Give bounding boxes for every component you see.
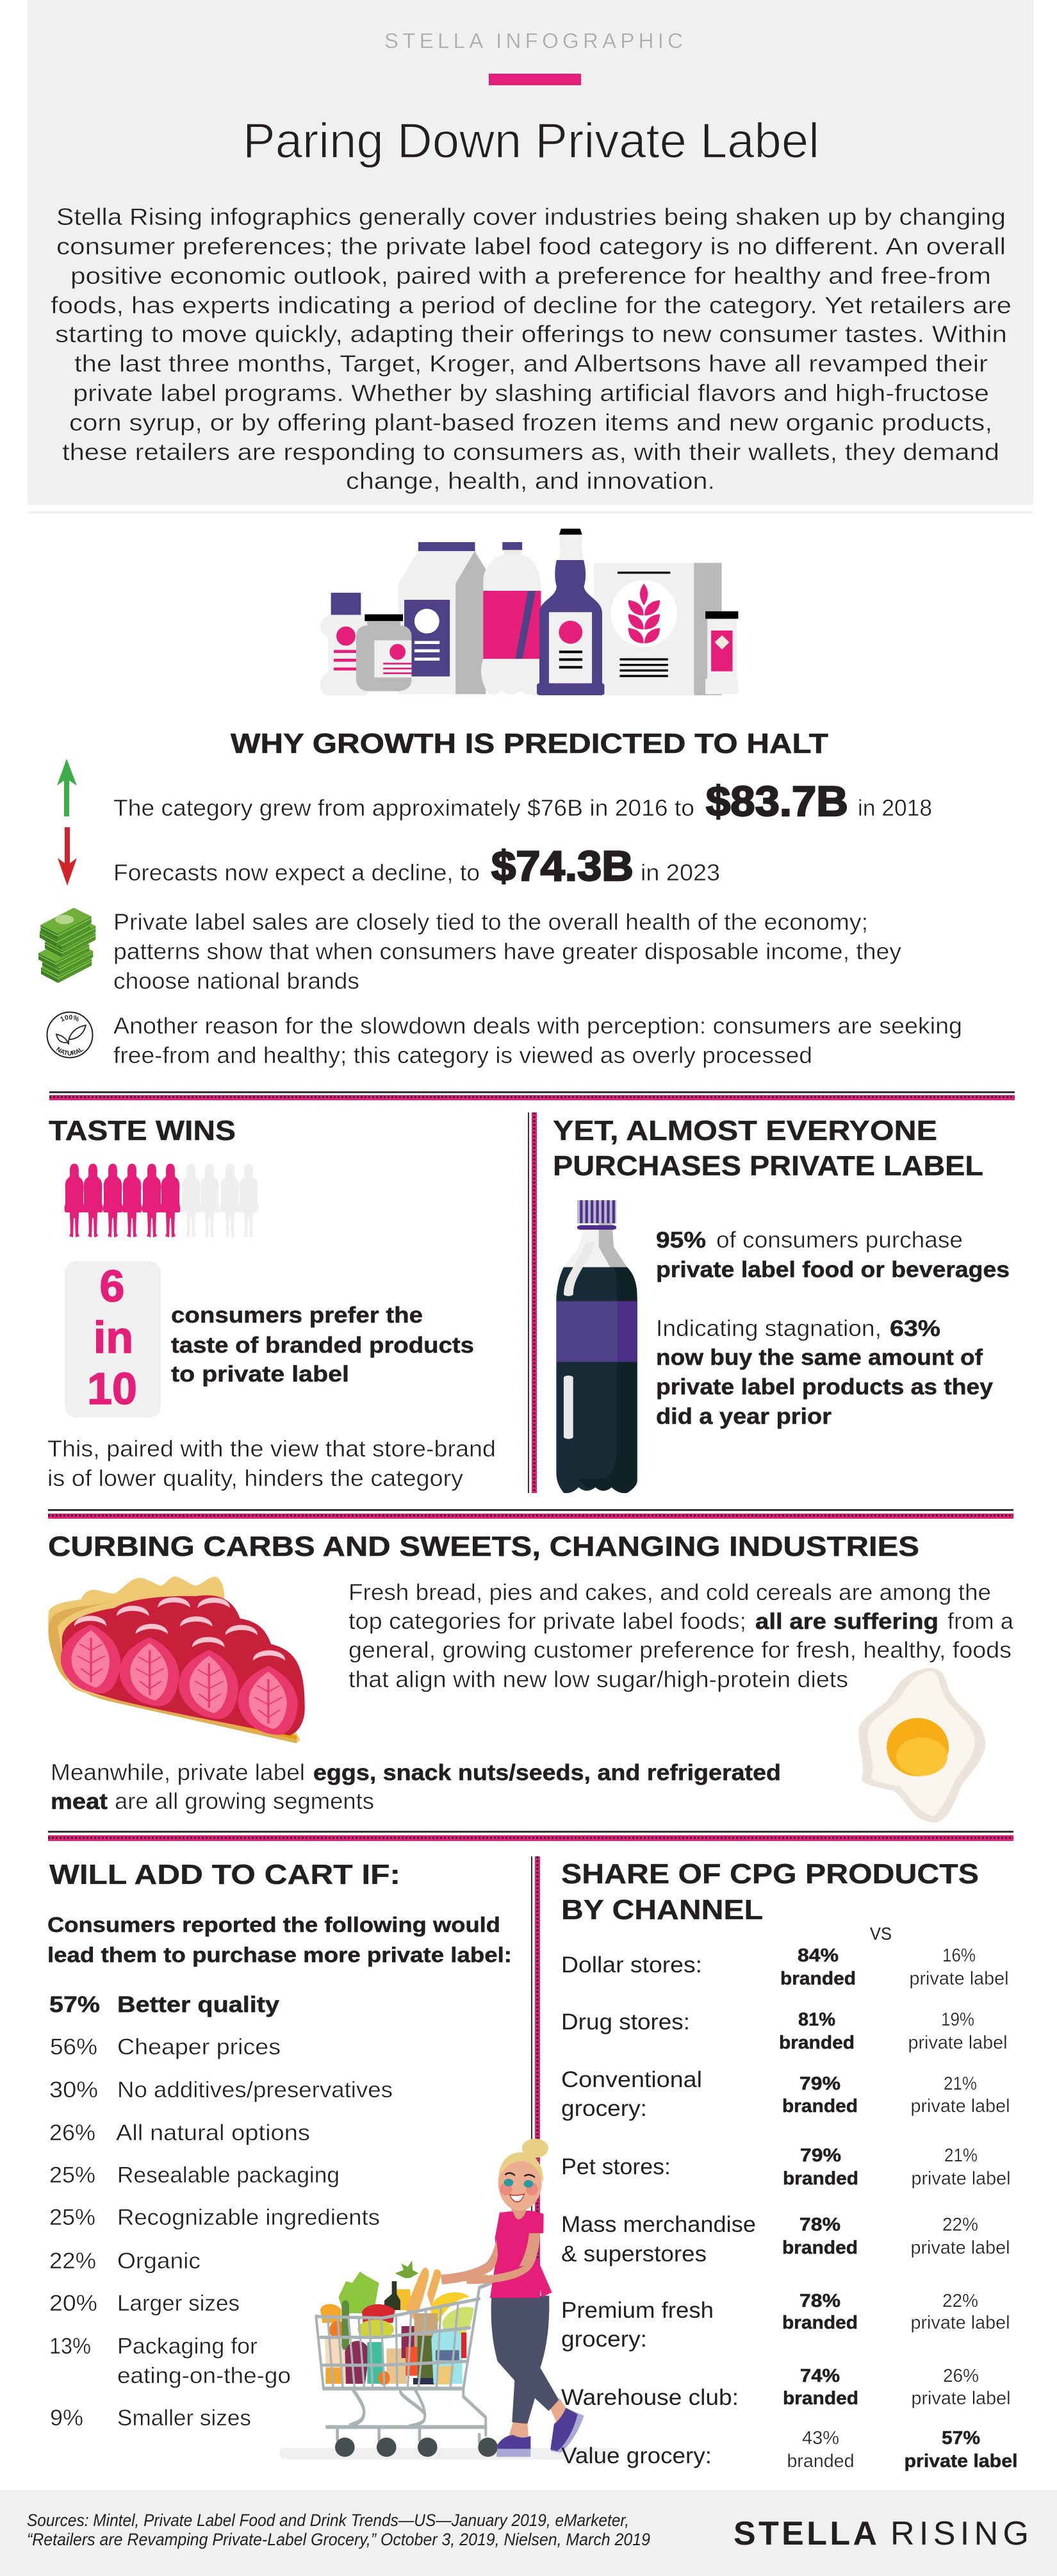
list: purchase drivers: 9% (50, 2406, 83, 2431)
woman figure (441, 2139, 584, 2457)
table: channel shares: private label (910, 1969, 1008, 1989)
subheading: lead them to purchase more private label: (47, 1943, 512, 1967)
table: channel shares: grocery: (561, 2096, 647, 2121)
heading (553, 1115, 983, 1182)
illustration: woman pushing shopping cart (279, 2139, 619, 2459)
pictogram: 6 of 10 people (64, 1164, 259, 1237)
text: top categories suffering: Fresh bread, pies and cakes, and cold cereals are among the (348, 1579, 991, 1605)
table: channel shares: 21% (944, 2145, 978, 2166)
text: growing segments: eggs, snack nuts/seeds, and refrigerated (313, 1760, 781, 1785)
decline stat: Forecasts now expect a decline, to (113, 859, 480, 886)
icon: stack of money (38, 908, 95, 983)
eyebrow: Stella Infographic: STELLA INFOGRAPHIC (384, 29, 683, 53)
table: channel shares: private label (911, 2168, 1011, 2189)
panel: why growth is predicted to halt (38, 728, 962, 1068)
panel: curbing carbs and sweets (48, 1531, 1014, 1822)
list: purchase drivers: 22% (49, 2249, 96, 2274)
text: top categories suffering: from a (947, 1608, 1014, 1634)
panel: header (28, 0, 1033, 505)
table: channel shares: Drug stores: (561, 2010, 690, 2035)
heading: BY CHANNEL (561, 1894, 763, 1926)
list: purchase drivers: Better quality (117, 1992, 280, 2017)
cart wheels (335, 2438, 498, 2457)
table: channel shares: 81% (798, 2010, 835, 2030)
accent bar (489, 74, 581, 85)
intro paragraph: Stella Rising infographics generally cover industries being shaken up by changing (56, 204, 1006, 230)
table: channel shares: private label (911, 2313, 1010, 2333)
sources: “Retailers are Revamping Private-Label Grocery,” October 3, 2019, Nielsen, March 2019 (27, 2530, 650, 2549)
logo: Stella Rising (733, 2515, 1029, 2552)
table: channel shares: Warehouse club: (561, 2385, 739, 2410)
table: channel shares: branded (782, 2313, 858, 2333)
intro paragraph: private label programs. Whether by slashing artificial flavors and high-fructose (73, 380, 989, 406)
perception text: free-from and healthy; this category is viewed as overly processed (113, 1042, 812, 1068)
economy text: Private label sales are closely tied to the overall health of the economy; (113, 909, 868, 935)
cart frame (316, 2281, 497, 2441)
illustration: fried egg (858, 1668, 985, 1822)
heading: PURCHASES PRIVATE LABEL (553, 1150, 983, 1182)
stat: 63%: Indicating stagnation, (656, 1315, 881, 1341)
table: channel shares: 57% (942, 2428, 980, 2448)
logo: Stella Rising: RISING (890, 2515, 1029, 2552)
stat: 95%: of consumers purchase (716, 1226, 963, 1253)
text: top categories suffering (348, 1579, 1014, 1692)
intro paragraph: corn syrup, or by offering plant-based frozen items and new organic products, (69, 409, 992, 436)
panel: will add to cart if (47, 1859, 512, 2431)
intro paragraph: positive economic outlook, paired with a preference for healthy and free-from (70, 263, 991, 289)
table: channel shares: Value grocery: (561, 2443, 712, 2468)
list: purchase drivers: 26% (49, 2120, 95, 2145)
intro paragraph: foods, has experts indicating a period of decline for the category. Yet retailers are (51, 292, 1012, 318)
list: purchase drivers: 56% (50, 2035, 97, 2060)
growth stat (113, 777, 932, 825)
statement: consumers prefer branded taste: consumers prefer the (171, 1303, 423, 1328)
table: channel shares: 79% (800, 2145, 841, 2166)
table: channel shares: 19% (941, 2010, 974, 2030)
intro paragraph: consumer preferences; the private label food category is no different. An overall (56, 233, 1006, 260)
table: channel shares: private label (905, 2451, 1017, 2472)
list: purchase drivers: Packaging for (117, 2334, 258, 2359)
list: purchase drivers: 20% (49, 2291, 97, 2316)
note: store-brand quality: is of lower quality, hinders the category (47, 1465, 463, 1491)
list: purchase drivers: Recognizable ingredients (117, 2205, 380, 2230)
icon: 100% natural badge (46, 1011, 94, 1059)
economy text: choose national brands (113, 968, 359, 994)
list: purchase drivers: eating-on-the-go (117, 2363, 291, 2388)
stat: 95%: private label food or beverages (656, 1257, 1010, 1282)
table: channel shares: branded (783, 2168, 858, 2189)
table: channel shares: private label (911, 2238, 1010, 2258)
table: channel shares: 78% (799, 2215, 840, 2235)
table: channel shares: private label (908, 2033, 1007, 2053)
list: purchase drivers: Smaller sizes (117, 2406, 251, 2431)
stat: 63%: 63% (890, 1316, 940, 1341)
table: channel shares: 22% (942, 2215, 978, 2235)
economy text: patterns show that when consumers have greater disposable income, they (113, 938, 901, 964)
table: channel shares: Dollar stores: (561, 1953, 702, 1977)
title: Paring Down Private Label (243, 113, 819, 169)
list: purchase drivers: 25% (49, 2205, 95, 2230)
list: purchase drivers (49, 1992, 393, 2431)
table: channel shares: 22% (942, 2291, 978, 2311)
table: channel shares: Conventional (561, 2067, 702, 2092)
text: growing segments: meat (51, 1789, 108, 1814)
illustration: soda bottle (556, 1200, 637, 1493)
perception text (113, 1012, 962, 1068)
heading: TASTE WINS (49, 1115, 236, 1146)
table: channel shares: branded (783, 2388, 858, 2409)
table: channel shares: branded (780, 1969, 856, 1989)
text: top categories suffering: top categories for private label foods; (348, 1608, 746, 1634)
list: purchase drivers: Organic (117, 2249, 201, 2274)
statement: consumers prefer branded taste: to private label (171, 1362, 349, 1387)
heading: WILL ADD TO CART IF: (49, 1859, 400, 1890)
stat: 63% (656, 1315, 994, 1429)
intro paragraph: the last three months, Target, Kroger, and Albertsons have all revamped their (74, 351, 988, 377)
list: purchase drivers: No additives/preservatives (117, 2077, 393, 2102)
subheading: Consumers reported the following would (47, 1913, 500, 1936)
list: purchase drivers: All natural options (116, 2120, 310, 2145)
perception text: Another reason for the slowdown deals with perception: consumers are seeking (113, 1012, 962, 1039)
intro paragraph (51, 204, 1012, 494)
table: channel shares: 79% (799, 2074, 840, 2094)
subheading (47, 1913, 512, 1967)
icon: red down arrow (58, 827, 77, 886)
growth stat: $83.7B (706, 777, 848, 825)
callout: 6 in 10: 10 (87, 1364, 137, 1414)
table: channel shares: 74% (800, 2366, 840, 2386)
heading: SHARE OF CPG PRODUCTS (561, 1858, 979, 1890)
table: channel shares: Premium fresh (561, 2298, 714, 2323)
list: purchase drivers: 25% (49, 2163, 95, 2188)
stat: 95%: 95% (656, 1228, 706, 1253)
callout: 6 in 10: in (94, 1312, 133, 1362)
stat: 63%: private label products as they (656, 1375, 994, 1399)
callout: 6 in 10: 6 (100, 1261, 124, 1311)
heading: WHY GROWTH IS PREDICTED TO HALT (231, 728, 828, 759)
heading: CURBING CARBS AND SWEETS, CHANGING INDUSTRIES (48, 1531, 919, 1562)
table: channel shares: branded (782, 2096, 858, 2117)
growth stat: in 2018 (858, 795, 932, 821)
economy text (113, 909, 901, 994)
panel: share of CPG products by channel (561, 1858, 1017, 2472)
decline stat: $74.3B (491, 842, 634, 889)
growth stat: The category grew from approximately $76B in 2016 to (113, 795, 694, 821)
panel: taste wins (47, 1115, 496, 1491)
sources (27, 2511, 650, 2549)
table: channel shares: private label (911, 2096, 1010, 2117)
table: channel shares: & superstores (561, 2242, 707, 2266)
stat: 63%: now buy the same amount of (656, 1345, 983, 1370)
list: purchase drivers: 30% (49, 2077, 98, 2102)
table: channel shares: Mass merchandise (561, 2212, 756, 2237)
list: purchase drivers: Larger sizes (117, 2291, 240, 2316)
statement: consumers prefer branded taste (171, 1303, 474, 1387)
table: channel shares (561, 1945, 1017, 2472)
table: channel shares: private label (911, 2388, 1011, 2409)
table: channel shares: 16% (942, 1945, 976, 1966)
callout: 6 in 10 (65, 1261, 161, 1417)
statement: consumers prefer branded taste: taste of branded products (171, 1333, 474, 1358)
groceries in the cart (320, 2261, 474, 2385)
illustration: strawberry pie slice (48, 1576, 305, 1744)
note: store-brand quality (47, 1435, 496, 1491)
text: top categories suffering: that align with new low sugar/high-protein diets (348, 1666, 848, 1692)
table: channel shares: branded (787, 2451, 855, 2472)
intro paragraph: change, health, and innovation. (346, 468, 715, 494)
vs label: VS (870, 1924, 892, 1944)
illustration: private label product packages (320, 529, 738, 695)
sources: Sources: Mintel, Private Label Food and Drink Trends—US—January 2019, eMarketer, (27, 2511, 629, 2530)
icon: 100% natural badge: NATURAL (56, 1047, 83, 1056)
table: channel shares: grocery: (561, 2327, 647, 2352)
heading: YET, ALMOST EVERYONE (553, 1115, 937, 1146)
decline stat (113, 842, 720, 889)
table: channel shares: 26% (943, 2366, 979, 2386)
list: purchase drivers: 13% (49, 2334, 91, 2359)
table: channel shares: 84% (798, 1945, 839, 1966)
list: purchase drivers: Resealable packaging (117, 2163, 340, 2188)
stat: 63%: did a year prior (656, 1404, 832, 1429)
icon: 100% natural badge: 100% (60, 1015, 79, 1021)
table: channel shares: branded (782, 2238, 858, 2258)
panel: footer (0, 2490, 1057, 2576)
list: purchase drivers: Cheaper prices (117, 2035, 281, 2060)
table: channel shares: branded (779, 2033, 855, 2053)
list: purchase drivers: 57% (49, 1992, 100, 2017)
intro paragraph: these retailers are responding to consumers as, with their wallets, they demand (62, 439, 999, 465)
text: top categories suffering: all are suffering (755, 1609, 938, 1634)
icon: green up arrow (57, 759, 77, 816)
text: growing segments: are all growing segments (115, 1788, 374, 1814)
logo: Stella Rising: STELLA (733, 2515, 877, 2552)
table: channel shares: 21% (944, 2074, 977, 2094)
decline stat: in 2023 (641, 859, 720, 886)
table: channel shares: 43% (802, 2428, 839, 2448)
note: store-brand quality: This, paired with the view that store-brand (47, 1435, 496, 1462)
table: channel shares: Pet stores: (561, 2154, 671, 2179)
table: channel shares: 78% (799, 2291, 840, 2311)
heading (561, 1858, 979, 1926)
panel: almost everyone purchases private label (553, 1115, 1010, 1493)
text: growing segments (51, 1759, 781, 1814)
text: top categories suffering: general, growing customer preference for fresh, healthy, foods (348, 1637, 1012, 1663)
text: growing segments: Meanwhile, private label (51, 1759, 305, 1785)
intro paragraph: starting to move quickly, adapting their offerings to new consumer tastes. Within (55, 321, 1007, 347)
stat: 95% (656, 1226, 1010, 1282)
